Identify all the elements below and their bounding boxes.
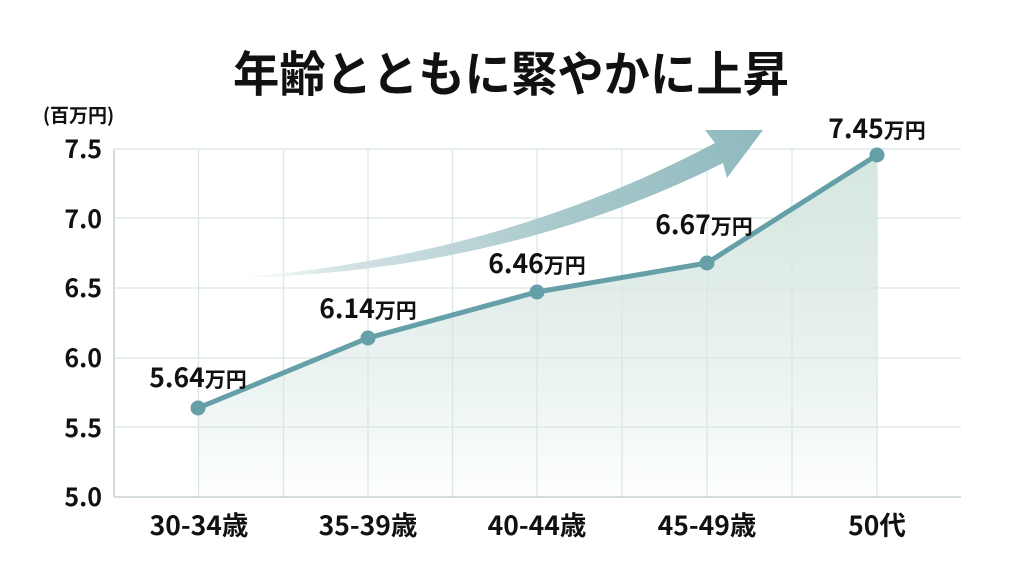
data labels: 6.46万円 [488, 242, 586, 281]
data labels: 5.64万円 [149, 356, 247, 395]
data labels: 6.14万円 [319, 287, 417, 326]
x axis labels: 50代 [848, 504, 906, 543]
x axis labels [150, 504, 906, 543]
data labels [149, 107, 926, 395]
x axis labels: 30-34歳 [150, 504, 248, 543]
title: 年齢とともに緊やかに上昇 [233, 35, 789, 105]
data line [190, 148, 884, 416]
growth arrow [232, 130, 763, 278]
y axis labels: 7.0 [64, 200, 102, 236]
x axis labels: 35-39歳 [319, 504, 417, 543]
y axis labels: 5.5 [64, 409, 102, 445]
y axis labels: 6.5 [64, 269, 102, 305]
y axis labels: 5.0 [64, 478, 102, 514]
y axis unit: (百万円) [43, 101, 114, 128]
grid [114, 149, 961, 497]
y axis labels: 6.0 [64, 339, 102, 375]
data labels: 6.67万円 [655, 203, 753, 242]
x axis labels: 45-49歳 [658, 504, 756, 543]
data labels: 7.45万円 [828, 107, 926, 146]
y axis labels [64, 130, 102, 514]
axes [114, 149, 961, 497]
area fill [198, 155, 877, 497]
y axis labels: 7.5 [64, 130, 102, 166]
x axis labels: 40-44歳 [488, 504, 586, 543]
